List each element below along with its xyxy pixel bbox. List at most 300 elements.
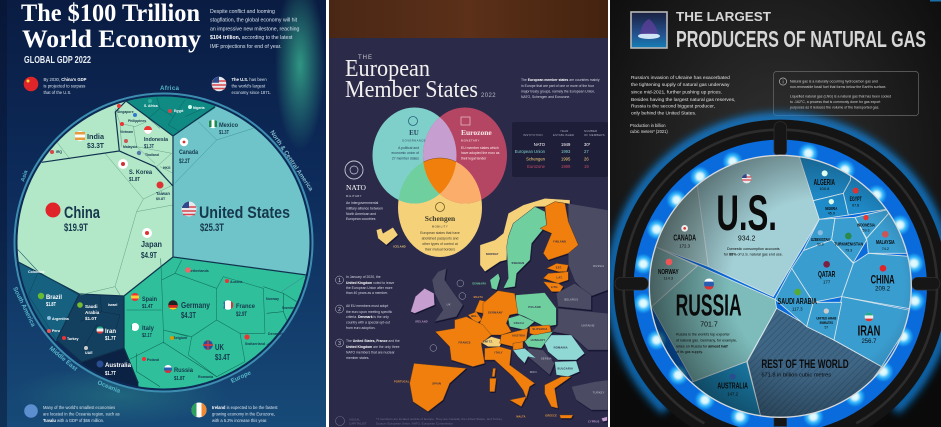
EU text: economic union of (391, 151, 419, 155)
cell: Rest of the world (747, 308, 882, 420)
region labels around ring: North & Central America (268, 129, 315, 193)
flag and label: Germany (168, 300, 210, 320)
Schengen text: other types of control at (422, 242, 458, 246)
info box: Liquefied natural gas (LNG) is a natural gas that has been cooled (790, 94, 891, 98)
country labels: LITH. (551, 285, 559, 289)
NATO block: MILITARY (346, 194, 362, 198)
table of institutions: YEAR (560, 129, 568, 133)
flag and label: Mexico (209, 120, 238, 136)
flag and label: Iran (96, 326, 116, 342)
numbered notes: United Kingdom voted to leave (346, 281, 394, 285)
map note markers (430, 280, 466, 351)
dark region borders (18, 101, 307, 383)
small Asian labels: Philippines (128, 119, 146, 123)
Eurozone text: MONETARY (461, 138, 480, 142)
flag and label: United Kingdom: UK (215, 343, 224, 352)
flag and label: Saudi Arabia: Saudi (85, 304, 98, 309)
label: Iran: 256.7 (861, 339, 877, 345)
Eurozone text: Eurozone (461, 128, 492, 137)
panel: European member states (329, 0, 608, 427)
note: Ireland: Ireland is expected to be the fastest (212, 405, 278, 410)
footnote: *3 members are located outside of Europe. They are Canada, the United States, and Turkey. (376, 417, 503, 421)
flag and label: Taiwan: Taiwan (156, 191, 170, 196)
small Middle East and South America labels: Turkey (67, 337, 79, 341)
small Asian labels: IRQ (56, 150, 62, 154)
table of institutions: 1949 (561, 142, 571, 147)
outside labels: GREECE (545, 415, 557, 418)
small European labels: Romania (198, 375, 214, 379)
flag and label: Mexico: $1.3T (219, 130, 229, 136)
label: Indonesia: 59.3 (862, 228, 870, 232)
EU text: GOVERNANCE (402, 138, 426, 142)
numbered notes (336, 275, 400, 360)
outside labels: CYPRUS (588, 420, 600, 423)
panel background (0, 0, 326, 427)
flag and label: France (223, 300, 255, 318)
NATO block: NATO (346, 183, 366, 192)
flag and label: Spain: $1.4T (142, 304, 153, 310)
note: Tuvalu (24, 404, 120, 423)
intro text: The European member states are countries mainly (521, 78, 600, 82)
label: Australia: 147.2 (727, 391, 739, 396)
intro text: stagflation, the global economy will hit (210, 18, 298, 24)
flag and label: Spain: Spain (142, 297, 157, 303)
numbered notes: criteria. Denmark is the only (346, 315, 389, 319)
flag and label: Brazil: $1.8T (46, 302, 56, 308)
numbered notes: 1 (338, 278, 341, 284)
country labels: GERMANY (488, 311, 503, 315)
label: Malaysia: 74.2 (882, 247, 889, 251)
label: United States: Domestic consumption accounts (727, 247, 780, 251)
label: Qatar (818, 261, 835, 285)
intro text (631, 75, 735, 116)
small Asian labels: Singapore (117, 110, 134, 114)
flag and label: Saudi Arabia: Arabia (85, 310, 100, 315)
label: Iran: IRAN (858, 323, 880, 339)
label: Indonesia (857, 215, 875, 232)
small Middle East and South America labels: Peru (52, 329, 60, 333)
note: Tuvalu: Tuvalu with a GDP of $66 million. (43, 418, 104, 423)
label: Nigeria (825, 199, 838, 216)
wood tabletop (329, 0, 608, 38)
flag and label: Iran: Iran (105, 329, 116, 335)
intro text: Russia is the second biggest producer, (631, 104, 715, 110)
aurora glow (275, 0, 325, 150)
label: Norway (658, 259, 679, 281)
country labels: ROMANIA (554, 346, 568, 350)
title: World Economy (22, 26, 202, 53)
outside labels: IRELAND (415, 321, 428, 324)
burner outer ring (614, 120, 941, 427)
NATO block: military alliance between (346, 206, 383, 210)
Africa labels: Nigeria (193, 106, 205, 110)
small European labels: Norway (266, 297, 279, 301)
numbered notes: from euro adoption. (346, 326, 375, 330)
label: Qatar: QATAR (818, 269, 835, 279)
table of institutions: OF MEMBERS (584, 133, 605, 137)
table of institutions: 19 (584, 164, 589, 169)
Africa labels (144, 99, 205, 113)
numbered notes: the euro upon meeting specific (346, 310, 392, 314)
small Middle East and South America labels: UAE (85, 351, 93, 355)
EU text: 27 member states (392, 156, 419, 160)
country labels: SPAIN (432, 381, 441, 385)
flag and label: United Kingdom (203, 340, 230, 362)
EU not Schengen Ireland and Cyprus (411, 288, 607, 422)
label: Saudi Arabia (778, 289, 817, 311)
EU text: A political and (398, 146, 419, 150)
flag and label: Brazil: Brazil (46, 295, 62, 301)
small Asian labels: Malaysia (123, 145, 137, 149)
intro text: major treaty groups, namely the European Union, (521, 90, 595, 94)
label: Qatar: 177 (823, 280, 831, 285)
flag and label: United States (182, 202, 290, 234)
corner accent (930, 0, 941, 2)
label: Rest of the world: 671.8 in billion cubic metres (761, 373, 831, 379)
country labels: FRANCE (459, 341, 471, 345)
table of institutions: 1993 (561, 149, 571, 154)
numbered notes: NATO members that are nuclear (346, 350, 396, 354)
table of institutions: INSTITUTION (523, 133, 543, 137)
label: Saudi Arabia: SAUDI ARABIA (778, 297, 817, 306)
NATO block: An intergovernmental (346, 201, 378, 205)
cell: Saudi Arabia (775, 268, 813, 327)
label: Russia: 701.7 (700, 322, 718, 329)
flag and label: China: $19.9T (64, 222, 88, 234)
NATO block: North American and (346, 212, 376, 216)
flag and label: Taiwan: $0.8T (156, 197, 166, 201)
country labels: LAT. (557, 275, 563, 279)
cell: Algeria (798, 153, 851, 201)
note: United States (212, 77, 271, 95)
numbered notes: 3 (338, 341, 341, 347)
cell: Egypt (843, 153, 903, 215)
Russia note: of its gas supply. (676, 350, 703, 354)
label: United States: for 88% of U.S. natural gas end use. (724, 253, 783, 257)
flag and label: Saudi Arabia (77, 302, 100, 321)
country labels: CZECH (514, 321, 524, 325)
flag and label: United States: $25.3T (200, 222, 224, 234)
label: Algeria: ALGERIA (814, 178, 835, 187)
cell: UAE (807, 302, 842, 340)
footnote: CAPITALIST (349, 422, 367, 426)
label: UAE: EMIRATES (820, 321, 833, 325)
flag and label: China (46, 202, 100, 234)
flag and label: Indonesia: $1.3T (144, 144, 154, 150)
small Middle East and South America labels: Argentina (52, 317, 70, 321)
table of institutions: 30* (584, 142, 591, 147)
cell: Uzbekistan (803, 218, 835, 251)
Africa labels: Egypt (174, 109, 184, 113)
note: Ireland (191, 402, 278, 423)
region labels around ring: Middle East (48, 345, 79, 373)
numbered notes: United Kingdom are the only three (346, 345, 400, 349)
intro text: Despite conflict and looming (210, 9, 275, 15)
panel background (329, 38, 608, 427)
flag and label: Iran: $1.7T (105, 336, 116, 342)
Eurozone countries (410, 202, 578, 418)
Schengen only countries (376, 198, 570, 347)
Eurozone text: have adopted the euro as (461, 151, 500, 155)
title: 2022 (481, 93, 496, 99)
flag and label: France: France (236, 303, 255, 310)
non-member labels: MON. (530, 370, 538, 374)
non-member labels: RUSSIA (593, 264, 604, 268)
footnote (336, 416, 503, 426)
intro text: in Europe that are part of one or more of the four (521, 84, 595, 88)
label: Turkmenistan: 79.3 (845, 249, 852, 253)
non-member labels: BELARUS (564, 297, 578, 301)
flag and label: Russia (164, 365, 194, 382)
flag and label: India: India (87, 132, 105, 141)
label: Turkmenistan (834, 233, 863, 253)
emblem icon (631, 12, 667, 48)
glass rim (649, 155, 911, 417)
numbered notes: country with a special opt-out (346, 320, 390, 324)
label: Rest of the world: REST OF THE WORLD (761, 357, 849, 371)
triple overlap (423, 158, 456, 194)
country labels: AUSTRIA (512, 334, 525, 338)
cell: Nigeria (813, 193, 848, 219)
title (676, 12, 926, 47)
label: Norway: 114.3 (663, 276, 674, 281)
cell: China (842, 253, 917, 310)
overlap EU and Schengen (398, 162, 440, 204)
country labels: EST. (556, 265, 562, 269)
table of institutions: 1999 (561, 164, 571, 169)
small European labels: Austria (230, 280, 243, 284)
outside labels: MALTA (474, 296, 483, 299)
flag and label: Indonesia (144, 126, 169, 150)
flag and label: United States: United States (199, 203, 290, 222)
region labels around ring: Europe (230, 369, 253, 385)
flag and label: Canada: Canada (179, 150, 199, 156)
label: UAE (816, 308, 837, 330)
country labels: SWITZ. (483, 340, 493, 344)
region labels around ring: Africa (160, 85, 180, 92)
table of institutions: 26 (584, 156, 589, 162)
production unit note (630, 123, 668, 134)
numbered notes: the European Union after more (346, 286, 393, 290)
small European labels (142, 267, 296, 379)
label: Nigeria: 45.9 (828, 212, 835, 216)
flag and label: Australia (96, 360, 131, 377)
treemap cells (640, 153, 917, 420)
label: Canada (673, 225, 696, 248)
small European labels: Belgium (173, 336, 187, 340)
light cell lines upper (40, 97, 253, 287)
non-member labels: TURKEY (593, 390, 605, 394)
subtitle: GLOBAL GDP 2022 (24, 55, 91, 66)
small Asian labels: Vietnam (120, 130, 133, 134)
Schengen text: Schengen (425, 214, 456, 223)
label: Canada: CANADA (673, 233, 696, 243)
outer ring (14, 94, 312, 392)
panel: natural gas producers (610, 0, 941, 427)
burner graphic (612, 118, 941, 427)
cell: Qatar (792, 240, 853, 302)
table of institutions: 1995 (561, 156, 571, 162)
table of institutions (512, 122, 608, 177)
panel: world economy (0, 0, 330, 427)
numbered notes: All EU members must adopt (346, 304, 388, 308)
outer blue glow (612, 118, 941, 410)
region labels around ring: Oceania (96, 379, 122, 395)
note: Tuvalu: are located in the Oceania region, such as (43, 412, 120, 416)
table of institutions: 27 (584, 149, 589, 154)
info box: purposes as it reduces the volume of the transported gas. (790, 106, 879, 110)
label: Norway: NORWAY (658, 267, 679, 276)
cell: Malaysia (867, 208, 913, 253)
map of Europe (376, 198, 608, 423)
small Asian labels: Thailand (145, 153, 159, 157)
Russia note: of natural gas. Germany, for example, (676, 339, 737, 343)
flag and label: China: China (64, 203, 100, 222)
country labels: ITALY (495, 351, 503, 355)
label: Uzbekistan (811, 230, 830, 246)
intro text: only behind the United States. (631, 110, 696, 116)
flag and label: Japan: Japan (141, 240, 162, 249)
cell: Canada (640, 153, 708, 267)
region: Africa (126, 96, 216, 136)
label: Saudi Arabia: 117.3 (792, 306, 803, 311)
note: China: that of the U.S. (44, 90, 71, 95)
region: South America (19, 263, 78, 341)
flag and label: India (75, 131, 105, 150)
small Middle East and South America labels: Colombia (28, 270, 45, 274)
Schengen text: abolished passports and (422, 236, 458, 240)
panel background (610, 0, 941, 427)
flag and label: Germany: $4.3T (181, 311, 196, 320)
country labels: BEL. (471, 314, 478, 318)
flag and label: Germany: Germany (181, 301, 210, 310)
non-member labels: SERBIA (541, 357, 552, 361)
label: Malaysia: MALAYSIA (876, 240, 895, 246)
Africa labels: S. Africa (144, 104, 158, 108)
label: China: CHINA (871, 272, 895, 286)
Schengen text: their mutual borders (425, 248, 455, 252)
flag and label: Mexico: Mexico (219, 123, 238, 129)
country labels (432, 239, 573, 385)
outside labels: DENMARK (472, 283, 486, 286)
small Asian labels: HKG (163, 166, 171, 170)
region: North and Central America (174, 106, 310, 275)
EU circle (372, 108, 456, 204)
flag and label: Australia: $1.7T (105, 371, 116, 377)
note: China: is projected to surpass (44, 84, 85, 88)
region: Middle East (57, 294, 124, 362)
Schengen text (420, 202, 460, 252)
NATO block: European countries (346, 217, 376, 221)
flag and label: Russia: $1.8T (174, 376, 185, 382)
table of institutions: ESTABLISHED (553, 133, 574, 137)
small European labels: Netherlands (188, 269, 209, 273)
label: China (871, 265, 895, 293)
label: Iran (858, 313, 880, 345)
flag and label: Japan: $4.9T (141, 251, 157, 260)
lower cell lines Europe (17, 248, 307, 387)
intro text: Besides having the largest natural gas reserves, (631, 97, 735, 103)
title (21, 0, 202, 53)
non-member countries (432, 203, 608, 410)
label: Australia (717, 374, 748, 396)
region: Oceania (82, 349, 138, 386)
note: China: By 2030, China's GDP (44, 77, 87, 82)
cell: Indonesia (855, 208, 893, 238)
country labels: FINLAND (553, 239, 566, 243)
title: Member States (345, 77, 478, 103)
flag and label: Brazil (38, 293, 62, 308)
non-member labels: UKRAINE (581, 323, 595, 327)
outside labels: MALTA (516, 416, 526, 419)
flag and label: Russia: Russia (174, 368, 194, 374)
overlap Eurozone and Schengen (424, 160, 482, 204)
venn diagram (372, 108, 507, 257)
label: Nigeria: NIGERIA (825, 206, 838, 211)
left edge band (0, 0, 7, 427)
EU text: EU (409, 129, 419, 137)
flag and label: Japan (141, 228, 162, 260)
label: United States: U.S. (716, 185, 777, 241)
info box: to -162°C, a process that is commonly done for gas export (790, 100, 880, 104)
region labels around ring (11, 85, 315, 395)
intro text: Russia's invasion of Ukraine has exacerbated (631, 75, 730, 81)
info box: i (782, 80, 784, 86)
Russia note: relies on Russia for almost half (676, 344, 728, 348)
flag and label: Canada (179, 138, 199, 165)
EU and Schengen countries (490, 207, 556, 348)
note: United States: the world's largest (232, 84, 266, 88)
EU text (391, 116, 426, 160)
table of institutions: European Union (515, 149, 546, 154)
cell: Norway (640, 247, 697, 307)
title: European (345, 56, 430, 82)
Russia note: Russia is the world's top exporter (676, 333, 731, 337)
flag and label: Taiwan (156, 182, 170, 201)
flag and label: South Korea: S. Korea (129, 170, 153, 176)
flag and label: Italy (131, 323, 155, 339)
Eurozone circle (423, 108, 507, 204)
flag and label: Canada: $2.2T (179, 159, 190, 165)
outside labels (393, 246, 600, 423)
Schengen text: MOBILITY (432, 224, 448, 228)
flag and label: Italy: $2.1T (142, 333, 152, 339)
intro text: $104 trillion, according to the latest (210, 35, 293, 41)
region labels around ring: South America (11, 286, 37, 328)
label: Australia: AUSTRALIA (717, 382, 748, 391)
note: United States: economy since 1871. (232, 90, 271, 95)
title: THE (358, 55, 373, 61)
small European labels: Switzerland (245, 342, 265, 346)
label: Malaysia (876, 231, 895, 251)
intro text: IMF projections for end of year. (210, 44, 282, 50)
label: Algeria: 100.8 (819, 186, 830, 191)
non-member labels: UK (447, 303, 451, 307)
label: Rest of the world (761, 357, 849, 379)
intro text (521, 78, 600, 99)
intro text: an impressive new milestone, reaching (210, 26, 299, 32)
label: UAE: UNITED ARAB (816, 317, 837, 321)
flag and label: India: $3.3T (87, 141, 104, 150)
region: Asia (18, 101, 172, 296)
flag and label: South Korea: $1.8T (129, 177, 140, 183)
flag and label: France: $2.9T (236, 312, 247, 318)
Eurozone text: their legal tender (461, 156, 487, 160)
EU only countries (513, 335, 585, 377)
flag and label: Indonesia: Indonesia (144, 137, 169, 143)
label: Canada: 172.3 (679, 243, 691, 248)
region labels around ring: Asia (20, 169, 30, 183)
